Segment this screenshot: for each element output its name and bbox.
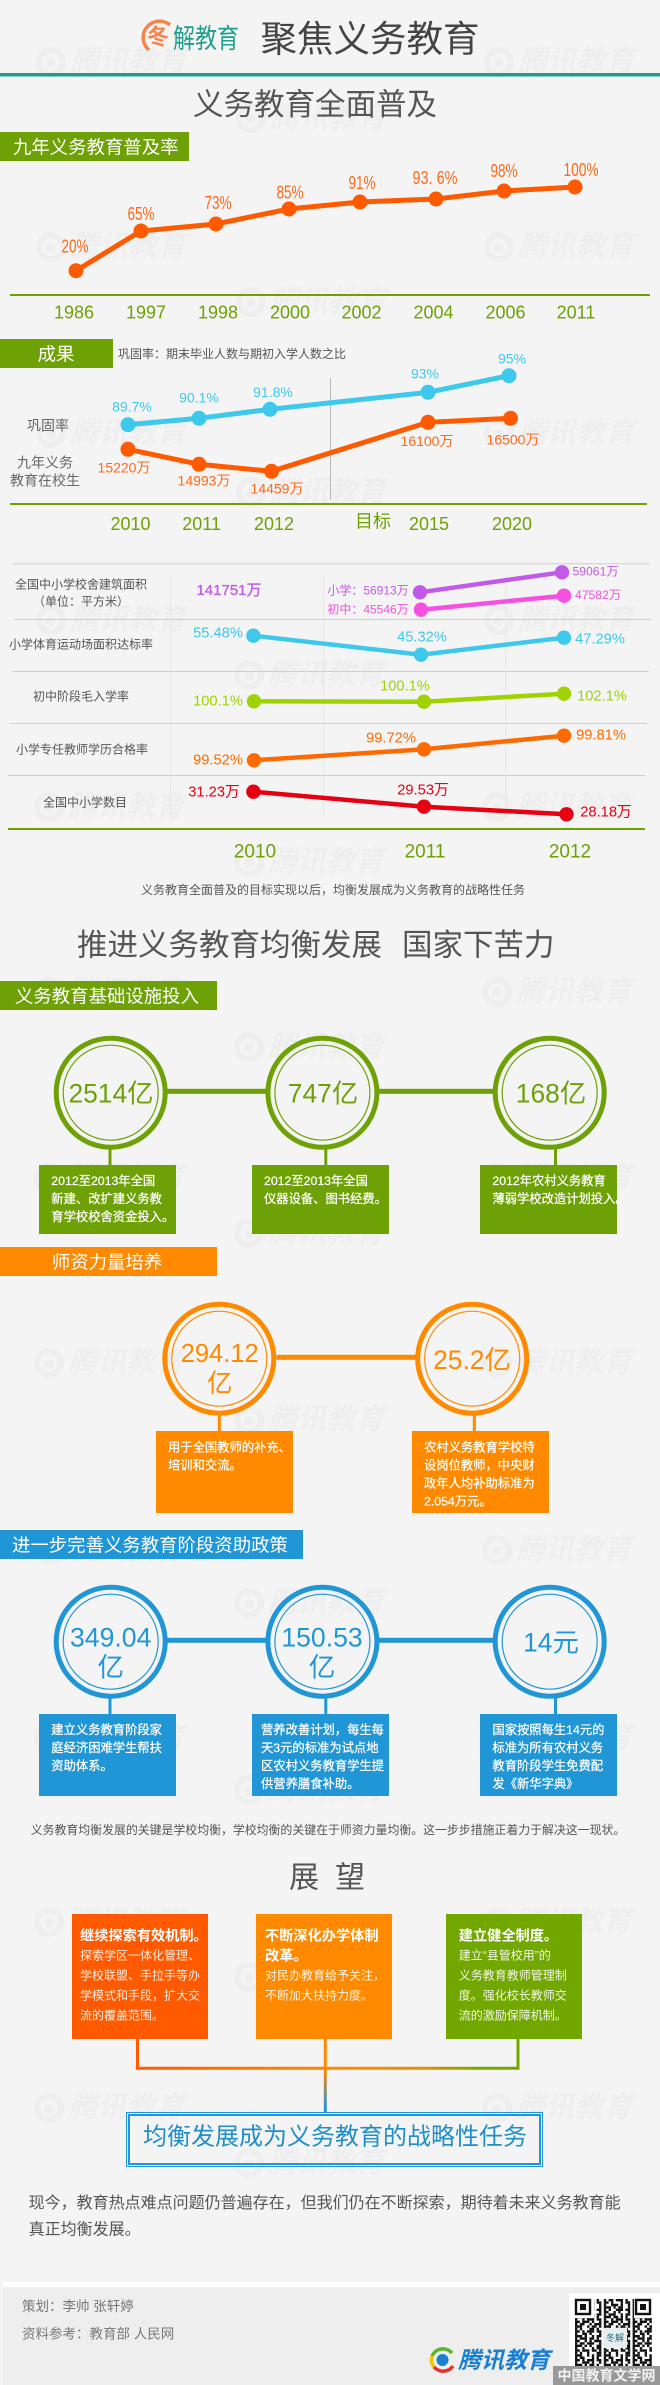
box: equipment and books: 仪器设备、图书经费。 [264, 1192, 387, 1206]
series: sports ground rate [193, 625, 625, 662]
text: 腾讯教育 [516, 790, 636, 823]
axis years: 目标 [355, 512, 391, 532]
series: gross enrollment rate [193, 678, 627, 710]
axis years: 2010 [234, 842, 276, 862]
heading: balanced development: 推进义务教育均衡发展 [77, 929, 382, 963]
box: sound system: 流的激励保障机制。 [459, 2007, 567, 2022]
row labels: 九年义务 [17, 455, 73, 471]
row labels: （单位：平方米） [33, 594, 129, 609]
text: 腾讯教育 [268, 845, 388, 878]
line chart: popularization rate: 85% [276, 183, 304, 203]
row labels: 巩固率 [27, 418, 69, 434]
closing paragraph: 现今，教育热点难点问题仍普遍存在，但我们仍在不断探索，期待着未来义务教育能 [29, 2194, 621, 2212]
box: nutrition plan: 营养改善计划，每生每 [261, 1722, 384, 1737]
line chart: enrolled students: 16100万 [401, 433, 453, 449]
box: rural school upgrade: 薄弱学校改造计划投入。 [492, 1191, 628, 1206]
box: effective mechanisms: 探索学区一体化管理、 [80, 1947, 200, 1962]
text: 腾讯教育 [518, 230, 638, 263]
line chart: popularization rate: 93. 6% [412, 168, 458, 188]
series: number of schools: 31.23万 [188, 784, 240, 800]
panel: financial aid policy [0, 1530, 617, 1796]
closing paragraph [29, 2194, 621, 2238]
series: number of schools [188, 783, 632, 822]
circle: 25.2亿: 25.2亿 [433, 1345, 511, 1375]
box: new school buildings: 2012至2013年全国 [51, 1173, 155, 1188]
panel: indicators table [8, 563, 651, 862]
text: 腾讯教育 [68, 1721, 188, 1754]
tag: infrastructure [0, 981, 217, 1010]
circle: 349.04亿: 349.04 [70, 1622, 152, 1652]
tag: teacher training: 师资力量培养 [52, 1252, 162, 1272]
caption: 义务教育全面普及的目标实现以后，均衡发展成为义务教育的战略性任务 [141, 882, 525, 897]
line chart: popularization rate: 1997 [126, 303, 166, 323]
text: 腾讯教育 [68, 790, 188, 823]
box: effective mechanisms: 学校联盟、手拉手等办 [80, 1967, 200, 1982]
closing paragraph: 真正均衡发展。 [29, 2220, 141, 2238]
icon: brand logo: 冬 [147, 24, 169, 50]
box: rural teacher subsidy: 农村义务教育学校特 [424, 1439, 535, 1454]
tag: results: 成果 [38, 344, 74, 364]
box: teacher supplement: 用于全国教师的补充、 [168, 1439, 291, 1454]
text: 腾讯教育 [268, 1586, 388, 1619]
text: 腾讯教育 [518, 603, 638, 636]
panel: infrastructure investment [0, 981, 628, 1234]
axis years [234, 842, 591, 862]
series: gross enrollment rate: 102.1% [577, 688, 627, 704]
heading: outlook: 望 [335, 1861, 365, 1894]
series: building area: 141751万 [196, 582, 262, 599]
axis years: 2012 [549, 842, 591, 862]
line chart: popularization rate: 73% [204, 193, 232, 213]
text: 腾讯教育 [518, 45, 638, 78]
series: sports ground rate: 47.29% [575, 631, 625, 647]
circle: 294.12亿: 294.12 [181, 1340, 259, 1368]
line chart: retention rate: 90.1% [179, 389, 219, 405]
circle: 294.12亿 [165, 1304, 274, 1413]
box: new school buildings: 育学校校舍资金投入。 [51, 1209, 174, 1224]
box: free dictionary: 教育阶段学生免费配 [492, 1758, 603, 1773]
box: teacher supplement [156, 1431, 293, 1513]
series: teacher qualification rate: 99.72% [366, 730, 416, 746]
credits [22, 2298, 174, 2342]
text: 腾讯教育 [268, 2146, 388, 2179]
circle: 14元 [495, 1587, 604, 1696]
circle: 168亿: 168亿 [516, 1078, 586, 1108]
line chart: popularization rate: 2004 [413, 303, 454, 323]
text: 腾讯教育 [68, 1533, 188, 1566]
text: 腾讯教育 [70, 416, 190, 449]
line chart: popularization rate: 2002 [341, 303, 382, 323]
line chart: popularization rate: 1986 [54, 303, 94, 323]
circle: 168亿 [495, 1038, 604, 1147]
box: rural school upgrade [480, 1165, 628, 1234]
tag: financial aid: 进一步完善义务教育阶段资助政策 [12, 1534, 288, 1556]
axis years: 2010 [110, 514, 151, 534]
series: gross enrollment rate: 100.1% [380, 678, 430, 694]
series: building area [196, 565, 621, 617]
line chart: retention rate: 91.8% [253, 384, 293, 400]
box: rural teacher subsidy [412, 1431, 549, 1513]
box: new school buildings: 新建、改扩建义务教 [51, 1191, 162, 1206]
box: free dictionary: 发《新华字典》 [492, 1776, 578, 1791]
row labels: 全国中小学校舍建筑面积 [15, 576, 147, 591]
series: sports ground rate: 55.48% [193, 625, 243, 641]
box: equipment and books [252, 1165, 389, 1234]
series: number of schools: 28.18万 [580, 804, 632, 820]
callout: strategic task: 均衡发展成为义务教育的战略性任务 [143, 2124, 527, 2150]
circle: 294.12亿: 亿 [207, 1370, 232, 1398]
text: 腾讯教育 [516, 1346, 636, 1379]
icon: brand logo [143, 21, 239, 54]
box: nutrition plan: 区农村义务教育学生提 [261, 1758, 384, 1773]
line chart: popularization rate: 20% [62, 237, 88, 257]
box: deepen system reform: 不断加大扶持力度。 [265, 1987, 373, 2002]
line chart: popularization rate: 2006 [485, 303, 526, 323]
box: sound system: 建立“县管校用”的 [459, 1947, 551, 1962]
box: rural teacher subsidy: 政年人均补助标准为 [424, 1476, 535, 1490]
circle: 25.2亿 [418, 1304, 527, 1413]
series: teacher qualification rate [193, 727, 626, 768]
box: student aid system [39, 1714, 176, 1796]
title: 聚焦义务教育 [260, 18, 480, 60]
circle: 349.04亿 [56, 1587, 165, 1696]
tag: teacher training [0, 1247, 217, 1276]
callout: strategic task [126, 2112, 542, 2166]
line chart: popularization rate: 1998 [198, 303, 238, 323]
heading: balanced development: 国家下苦力 [402, 929, 554, 963]
text: 腾讯教育 [68, 2091, 188, 2124]
tag: financial aid [0, 1530, 303, 1559]
box: free dictionary: 标准为所有农村义务 [492, 1740, 603, 1755]
text: 腾讯教育 [270, 475, 390, 508]
series: sports ground rate: 45.32% [397, 629, 447, 645]
circle: 150.53亿 [268, 1587, 377, 1696]
tag: popularization rate: 九年义务教育普及率 [13, 136, 179, 158]
footer [3, 2282, 660, 2385]
text: 腾讯教育 [70, 230, 190, 263]
circle: 349.04亿: 亿 [97, 1652, 124, 1682]
heading: outlook: 展 [289, 1861, 319, 1894]
box: sound system: 度。强化校长教师交 [459, 1987, 567, 2002]
axis years: 2011 [405, 842, 445, 862]
text: 腾讯教育 [68, 1346, 188, 1379]
axis years: 2011 [182, 514, 221, 534]
header [143, 18, 479, 60]
axis years: 2012 [254, 514, 294, 534]
circle: 747亿 [268, 1038, 377, 1147]
box: sound system: 义务教育教师管理制 [459, 1967, 567, 1982]
row labels [10, 418, 80, 489]
text: 腾讯教育 [518, 416, 638, 449]
circle: 2514亿: 2514亿 [68, 1078, 154, 1108]
icon: brand logo: 解教育 [173, 24, 239, 54]
series: building area: 47582万 [575, 588, 621, 602]
box: sound system [446, 1914, 582, 2039]
text: 腾讯教育 [268, 1403, 388, 1436]
axis years: 2015 [409, 514, 449, 534]
line chart: enrolled students: 15220万 [98, 460, 150, 476]
series: building area: 初中：45546万 [327, 602, 409, 617]
box: effective mechanisms: 流的覆盖范围。 [80, 2007, 164, 2022]
box: effective mechanisms [72, 1914, 208, 2039]
series: number of schools: 29.53万 [397, 783, 449, 799]
circle: 747亿: 747亿 [288, 1078, 358, 1108]
axis years: 2020 [492, 514, 532, 534]
axis years [110, 512, 532, 534]
text: 腾讯教育 [516, 975, 636, 1008]
note: retention rate definition: 巩固率：期末毕业人数与期初入学人数之比 [118, 346, 346, 361]
row labels [9, 576, 153, 810]
line chart: popularization rate [10, 160, 650, 323]
box: teacher supplement: 培训和交流。 [168, 1457, 242, 1472]
series: building area: 小学：56913万 [327, 583, 409, 598]
box: deepen system reform: 对民办教育给予关注， [265, 1967, 385, 1982]
caption: 义务教育均衡发展的关键是学校均衡，学校均衡的关键在于师资力量均衡。这一步步措施正着力于解决这一现状。 [31, 1823, 625, 1837]
tag: results [0, 339, 113, 368]
box: student aid system: 庭经济困难学生帮扶 [51, 1740, 162, 1755]
text: 腾讯教育 [268, 1773, 388, 1806]
line chart: enrolled students: 14993万 [178, 473, 230, 489]
connector lines [138, 2039, 518, 2113]
series: gross enrollment rate: 100.1% [193, 694, 243, 710]
credits: 策划：李帅 张轩婷 [22, 2298, 134, 2314]
line chart: retention rate: 89.7% [112, 398, 152, 414]
text: 腾讯教育 [268, 658, 388, 691]
circle: 150.53亿: 亿 [309, 1652, 335, 1682]
box: sound system: 建立健全制度。 [459, 1928, 558, 1945]
box: effective mechanisms: 学模式和手段，扩大交 [80, 1987, 200, 2002]
circle: 14元: 14元 [523, 1628, 579, 1658]
text: 腾讯教育 [516, 1161, 636, 1194]
series: building area: 59061万 [572, 565, 619, 579]
line chart: retention rate [112, 350, 526, 432]
QR code [569, 2293, 660, 2367]
text: 腾讯教育 [516, 1721, 636, 1754]
panel: teacher training [0, 1247, 549, 1513]
circle: 150.53亿: 150.53 [281, 1622, 363, 1652]
box: rural school upgrade: 2012年农村义务教育 [492, 1173, 606, 1188]
line chart: popularization rate: 2000 [270, 303, 310, 323]
icon: tencent logo: 腾讯教育 [458, 2347, 554, 2373]
box: free dictionary [480, 1714, 617, 1796]
text: 腾讯教育 [516, 1905, 636, 1938]
QR code: 冬解 [606, 2332, 624, 2343]
box: nutrition plan [252, 1714, 389, 1796]
line chart: enrolled students: 14459万 [251, 480, 303, 496]
line chart: popularization rate: 98% [490, 161, 518, 181]
text: 腾讯教育 [268, 1030, 388, 1063]
heading: universal compulsory education: 义务教育全面普及 [193, 88, 437, 122]
text: 腾讯教育 [270, 285, 390, 318]
row labels: 全国中小学数目 [43, 795, 127, 810]
row labels: 小学专任教师学历合格率 [16, 741, 148, 756]
box: effective mechanisms: 继续探索有效机制。 [80, 1928, 208, 1945]
text: 腾讯教育 [516, 1533, 636, 1566]
box: deepen system reform [256, 1914, 392, 2039]
text: 腾讯教育 [68, 1161, 188, 1194]
box: free dictionary: 国家按照每生14元的 [492, 1722, 604, 1737]
panel: results [0, 339, 647, 534]
series: teacher qualification rate: 99.81% [576, 727, 626, 743]
box: new school buildings [39, 1165, 176, 1234]
line chart: enrolled students: 16500万 [487, 431, 539, 447]
tag: infrastructure: 义务教育基础设施投入 [15, 986, 199, 1006]
row labels: 小学体育运动场面积达标率 [9, 637, 153, 652]
line chart: enrolled students [98, 411, 539, 496]
text: 腾讯教育 [70, 45, 190, 78]
tag: popularization rate [0, 132, 189, 161]
box: equipment and books: 2012至2013年全国 [264, 1173, 368, 1188]
text: 腾讯教育 [68, 1905, 188, 1938]
site badge: 中国教育文学网 [558, 2368, 656, 2384]
text: 腾讯教育 [516, 2091, 636, 2124]
box: rural teacher subsidy: 设岗位教师，中央财 [424, 1457, 535, 1472]
box: deepen system reform: 不断深化办学体制 [265, 1928, 379, 1945]
box: student aid system: 建立义务教育阶段家 [51, 1722, 162, 1737]
credits: 资料参考：教育部 人民网 [22, 2326, 174, 2342]
text: 腾讯教育 [268, 1960, 388, 1993]
text: 腾讯教育 [68, 975, 188, 1008]
box: deepen system reform: 改革。 [265, 1948, 308, 1965]
text: 腾讯教育 [270, 101, 390, 134]
line chart: retention rate: 93% [411, 365, 439, 381]
line chart: popularization rate: 100% [564, 160, 598, 180]
box: student aid system: 资助体系。 [51, 1759, 113, 1773]
line chart: popularization rate: 65% [128, 204, 154, 224]
box: nutrition plan: 天3元的标准为试点地 [261, 1740, 379, 1755]
line chart: popularization rate: 2011 [557, 303, 595, 323]
panel: nine-year popularization rate [0, 132, 650, 323]
line chart: popularization rate: 91% [348, 173, 376, 193]
series: teacher qualification rate: 99.52% [193, 752, 243, 768]
box: nutrition plan: 供营养膳食补助。 [261, 1776, 359, 1791]
circle: 2514亿 [56, 1038, 165, 1147]
panel: outlook [72, 1914, 582, 2166]
box: rural teacher subsidy: 2.054万元。 [424, 1494, 492, 1508]
text: 腾讯教育 [70, 603, 190, 636]
row labels: 初中阶段毛入学率 [33, 688, 129, 703]
line chart: retention rate: 95% [498, 350, 526, 366]
text: 腾讯教育 [268, 1216, 388, 1249]
row labels: 教育在校生 [10, 473, 80, 489]
